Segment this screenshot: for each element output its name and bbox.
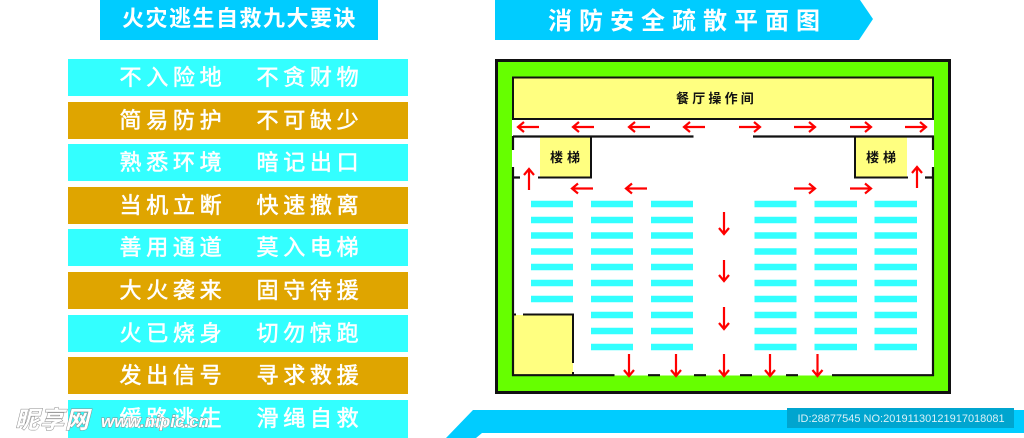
dining tables (531, 204, 917, 347)
rule 8: 发出信号 (120, 363, 226, 388)
arrows: hall row (572, 184, 871, 194)
rule 6 (68, 272, 408, 309)
rule 5 (68, 229, 408, 266)
rule 6: 大火袭来 (120, 278, 226, 303)
arrows: corridor right (739, 122, 926, 132)
interior and side walls (512, 136, 934, 376)
rule 8: 寻求救援 (256, 363, 363, 388)
heading: fire escape nine rules: 火灾逃生自救九大要诀 (122, 6, 357, 31)
ID stamp: ID:28877545 NO:20191130121917018081 (798, 413, 1005, 425)
rule 5: 莫入电梯 (256, 235, 363, 260)
room: lower-left storage (513, 314, 573, 375)
building outer wall and green surround (496, 60, 950, 392)
room: left stairs (538, 137, 591, 178)
bottom banner (446, 410, 1024, 438)
room: kitchen (513, 78, 933, 119)
rule 7: 火已烧身 (120, 321, 226, 346)
rule 1: 不贪财物 (256, 65, 363, 90)
heading: evacuation plan arrow banner: 消防安全疏散平面图 (548, 8, 827, 35)
rule 8 (68, 357, 408, 394)
panel: nine rules list (68, 59, 408, 438)
rule 1: 不入险地 (120, 65, 226, 90)
arrows: bottom exits down (624, 354, 822, 376)
arrows: up to side exits (524, 167, 922, 190)
rule 2: 不可缺少 (256, 108, 363, 133)
rule 1 (68, 59, 408, 96)
floor interior (512, 77, 934, 376)
floor plan (496, 60, 950, 392)
room: left stairs: 楼梯 (550, 150, 584, 165)
rule 9 (68, 400, 408, 438)
rule 4: 快速撤离 (256, 193, 363, 218)
room: right stairs (855, 137, 908, 178)
room: right stairs: 楼梯 (866, 150, 900, 165)
heading: fire escape nine rules (100, 0, 378, 40)
rule 3: 熟悉环境 (120, 150, 226, 175)
room: kitchen: 餐厅操作间 (676, 91, 757, 106)
rule 7: 切勿惊跑 (256, 321, 363, 346)
rule 4 (68, 187, 408, 224)
rule 5: 善用通道 (120, 235, 226, 260)
arrows: corridor left (518, 122, 705, 132)
rule 2: 简易防护 (120, 108, 226, 133)
rule 4: 当机立断 (120, 193, 226, 218)
rule 9: 缓路逃生 (120, 406, 226, 431)
watermark (15, 407, 209, 434)
rule 9: 滑绳自救 (256, 406, 363, 431)
rule 7 (68, 315, 408, 352)
rule 2 (68, 102, 408, 139)
rule 3: 暗记出口 (256, 150, 363, 175)
ID stamp (787, 408, 1014, 428)
watermark: www.nipic.cn (101, 412, 209, 431)
arrows: central aisle down (719, 212, 729, 329)
watermark: 昵享网 (15, 407, 92, 434)
rule 3 (68, 144, 408, 181)
heading: evacuation plan arrow banner (495, 0, 873, 40)
rule 6: 固守待援 (256, 278, 363, 303)
